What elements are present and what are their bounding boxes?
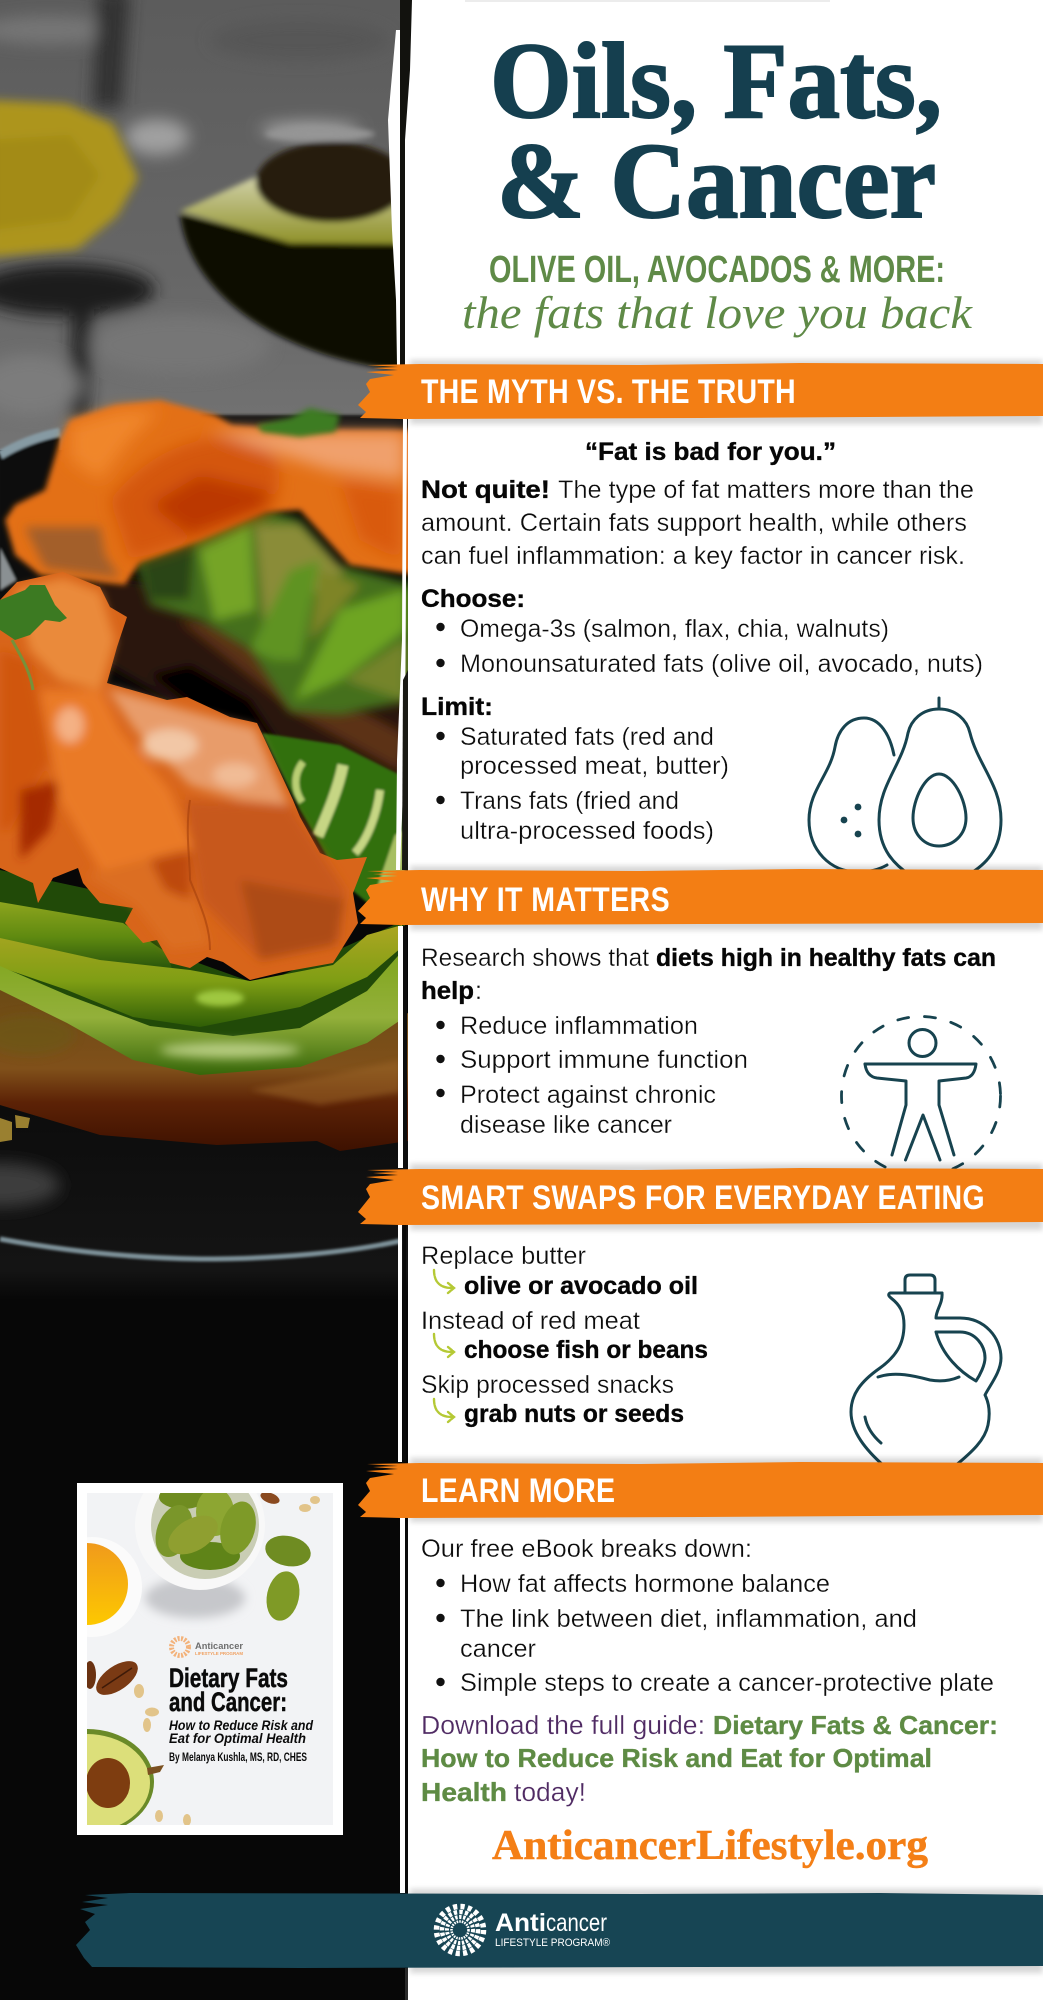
title bbox=[490, 22, 942, 241]
explanation paragraph: can fuel inflammation: a key factor in cancer risk. bbox=[421, 542, 965, 570]
choose list: Choose: bbox=[421, 585, 525, 613]
download call to action bbox=[421, 1710, 998, 1807]
book title: Eat for Optimal Health bbox=[169, 1731, 306, 1746]
choose list: Omega-3s (salmon, flax, chia, walnuts) bbox=[460, 615, 889, 643]
download call to action: today! bbox=[514, 1779, 586, 1807]
choose list bbox=[421, 585, 983, 678]
ebook topics list bbox=[436, 1570, 994, 1697]
intro text: Research shows that bbox=[421, 944, 649, 972]
limit list: Trans fats (fried and bbox=[460, 787, 679, 815]
footer logo wordmark bbox=[495, 1909, 610, 1949]
ebook topics list: The link between diet, inflammation, and bbox=[460, 1605, 917, 1633]
heading band: the myth vs the truth: THE MYTH VS. THE TRUTH bbox=[421, 373, 796, 411]
parsley bbox=[0, 585, 67, 690]
book logo: Anticancer bbox=[195, 1641, 243, 1652]
benefits list: Support immune function bbox=[460, 1046, 748, 1074]
avocado slices bbox=[0, 902, 173, 972]
book cover bbox=[77, 1483, 343, 1835]
title: Oils, Fats, bbox=[490, 22, 942, 141]
download call to action: How to Reduce Risk and Eat for Optimal bbox=[421, 1743, 932, 1773]
swap 3: Skip processed snacks bbox=[421, 1371, 674, 1399]
intro text bbox=[421, 944, 996, 1005]
white content panel bbox=[408, 0, 1043, 2000]
subtitle bbox=[462, 249, 973, 338]
swap 1: Replace butter bbox=[421, 1242, 586, 1270]
benefits list: disease like cancer bbox=[460, 1111, 672, 1139]
heading band: the myth vs the truth bbox=[358, 363, 1043, 419]
icon: oil jug bbox=[851, 1275, 1001, 1466]
book logo bbox=[172, 1638, 243, 1656]
website link: AnticancerLifestyle.org bbox=[492, 1823, 928, 1869]
front avocado fan bbox=[262, 733, 405, 905]
limit list: processed meat, butter) bbox=[460, 752, 729, 780]
explanation paragraph: Not quite! bbox=[421, 476, 550, 504]
limit list bbox=[421, 693, 729, 845]
back avocado bbox=[135, 510, 415, 715]
panel: smart swaps bbox=[421, 1242, 1001, 1466]
photo: smoked salmon and avocado toast bbox=[0, 0, 415, 2000]
ebook topics list: Simple steps to create a cancer-protective plate bbox=[460, 1669, 994, 1697]
limit list: Saturated fats (red and bbox=[460, 723, 714, 751]
footer logo mark bbox=[436, 1906, 484, 1954]
title: & Cancer bbox=[497, 122, 936, 241]
lemon bbox=[0, 100, 138, 257]
swap 2 bbox=[421, 1307, 708, 1364]
brush edge streaks bbox=[388, 0, 412, 2000]
icon: human figure in dashed circle bbox=[842, 1016, 1000, 1176]
back parsley bbox=[257, 408, 340, 437]
limit list: ultra-processed foods) bbox=[460, 817, 714, 845]
explanation paragraph bbox=[421, 476, 974, 570]
ebook topics list: cancer bbox=[460, 1635, 536, 1663]
book title bbox=[169, 1663, 314, 1764]
subtitle: the fats that love you back bbox=[462, 288, 973, 338]
section band shadows bbox=[410, 360, 1043, 1973]
heading band: smart swaps: SMART SWAPS FOR EVERYDAY EATING bbox=[421, 1179, 985, 1217]
download call to action: Download the full guide: bbox=[421, 1712, 705, 1740]
download call to action: Health bbox=[421, 1777, 507, 1807]
panel: learn more bbox=[421, 1535, 998, 1869]
bread bbox=[0, 985, 410, 1153]
limit list: Limit: bbox=[421, 693, 493, 721]
heading band: learn more: LEARN MORE bbox=[421, 1472, 615, 1510]
ebook topics list: How fat affects hormone balance bbox=[460, 1570, 830, 1598]
book title: How to Reduce Risk and bbox=[169, 1718, 314, 1733]
back salmon bbox=[5, 400, 415, 585]
book title: By Melanya Kushla, MS, RD, CHES bbox=[169, 1752, 307, 1764]
panel: myth vs truth bbox=[421, 438, 1001, 875]
benefits list: Reduce inflammation bbox=[460, 1012, 698, 1040]
plate bbox=[0, 1105, 408, 1300]
explanation paragraph: amount. Certain fats support health, while others bbox=[421, 509, 967, 537]
benefits list: Protect against chronic bbox=[460, 1081, 716, 1109]
book logo: LIFESTYLE PROGRAM bbox=[195, 1651, 243, 1656]
heading band: smart swaps bbox=[358, 1168, 1043, 1225]
benefits list bbox=[436, 1012, 748, 1139]
swap 1 bbox=[421, 1242, 698, 1300]
swap 1: olive or avocado oil bbox=[464, 1272, 698, 1300]
panel: why it matters bbox=[421, 944, 1000, 1176]
heading band: learn more bbox=[358, 1462, 1043, 1518]
footer logo wordmark: LIFESTYLE PROGRAM® bbox=[495, 1937, 610, 1949]
swap 3: grab nuts or seeds bbox=[464, 1400, 684, 1428]
choose list: Monounsaturated fats (olive oil, avocado, nuts) bbox=[460, 650, 983, 678]
download call to action: Dietary Fats & Cancer: bbox=[713, 1710, 998, 1740]
ebook intro: Our free eBook breaks down: bbox=[421, 1535, 752, 1563]
dark avocado under salmon bbox=[0, 870, 405, 1036]
avocado half in background bbox=[180, 127, 415, 372]
footer band bbox=[76, 1893, 1043, 1968]
book title: and Cancer: bbox=[169, 1687, 287, 1717]
front salmon bbox=[0, 572, 367, 980]
explanation paragraph: The type of fat matters more than the bbox=[558, 476, 974, 504]
heading band: why it matters: WHY IT MATTERS bbox=[421, 881, 670, 919]
intro text: : bbox=[475, 977, 482, 1005]
swap 3 bbox=[421, 1371, 684, 1428]
back bread bbox=[94, 577, 400, 774]
footer logo wordmark: cancer bbox=[546, 1909, 607, 1937]
swap 2: Instead of red meat bbox=[421, 1307, 640, 1335]
heading band: why it matters bbox=[358, 869, 1043, 925]
icon: avocado bbox=[809, 698, 1001, 875]
book title: Dietary Fats bbox=[169, 1663, 288, 1693]
back plate rim bbox=[0, 415, 415, 600]
intro text: help bbox=[421, 977, 474, 1005]
footer logo wordmark: Anti bbox=[495, 1909, 546, 1937]
top hairline bbox=[465, 0, 830, 2]
myth quote: “Fat is bad for you.” bbox=[585, 438, 836, 466]
intro text: diets high in healthy fats can bbox=[656, 944, 996, 972]
swap 2: choose fish or beans bbox=[464, 1336, 708, 1364]
